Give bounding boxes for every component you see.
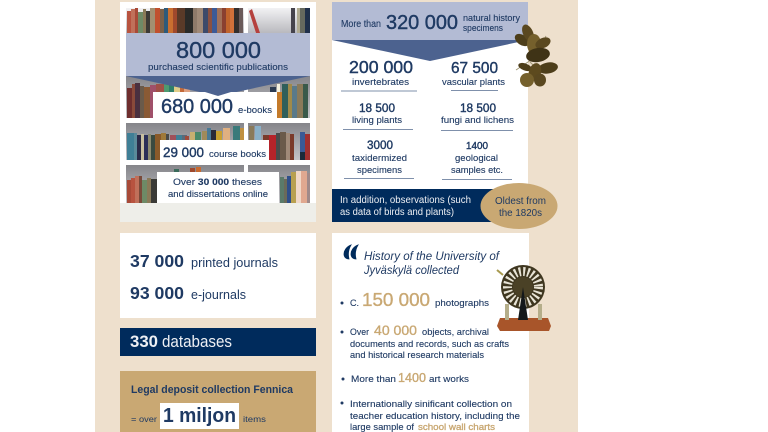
label box: theses and dissertations: and dissertations online xyxy=(168,189,268,200)
heading: 320 000 natural history specimens xyxy=(341,12,520,34)
bullet: art works: 1400 xyxy=(398,371,426,385)
stat: vascular plants: vascular plants xyxy=(442,77,505,88)
label: purchased scientific publications: purchased scientific publications xyxy=(148,62,288,72)
label box: 29 000 course books: course books xyxy=(209,149,266,160)
panel: databases xyxy=(120,328,316,356)
background panel xyxy=(95,0,578,432)
bullet: art works xyxy=(342,371,469,385)
panel: legal deposit collection: Legal deposit collection Fennica xyxy=(131,384,294,396)
bullet: art works: More than xyxy=(351,374,396,385)
stat: fungi and lichens xyxy=(441,101,514,131)
heading: 320 000 natural history specimens: 320 000 xyxy=(386,12,458,34)
icon: quotation mark xyxy=(344,245,358,259)
panel: databases: 330 xyxy=(130,333,158,351)
bullet: teacher education history: teacher education history, including the xyxy=(350,411,520,422)
stat: living plants: living plants xyxy=(352,115,402,126)
panel: journals: printed journals xyxy=(191,255,278,270)
label box: 29 000 course books: 29 000 xyxy=(163,145,204,160)
panel: publications bookshelf xyxy=(120,2,316,222)
bookshelf row 1 xyxy=(126,8,310,33)
stat: fungi and lichens: fungi and lichens xyxy=(441,115,514,126)
icon: pressed plant xyxy=(513,23,559,87)
stat: fungi and lichens: 18 500 xyxy=(460,101,496,115)
bullet: objects: objects, archival xyxy=(422,327,489,338)
bullet: teacher education history xyxy=(340,399,520,432)
band: 800 000 publications xyxy=(126,33,310,96)
bookshelf row 3 xyxy=(126,123,310,160)
stat: living plants xyxy=(343,101,413,130)
stat: taxidermized specimens xyxy=(344,138,414,179)
bullet: art works: art works xyxy=(429,374,469,385)
bullet: objects: and historical research materials xyxy=(350,350,484,361)
bookshelf row 2 xyxy=(126,76,310,118)
stat: living plants: 18 500 xyxy=(359,101,395,115)
heading: 320 000 natural history specimens: specimens xyxy=(463,23,503,33)
panel: journals: e-journals xyxy=(191,287,246,302)
panel: legal deposit collection: 1 miljon xyxy=(163,405,236,427)
label box: 680 000 e-books: 680 000 xyxy=(161,96,233,118)
panel: journals: 37 000 xyxy=(130,251,184,271)
panel: databases: databases xyxy=(162,333,232,351)
label box: 680 000 e-books xyxy=(153,92,277,118)
callout: oldest from the 1820s: Oldest from xyxy=(495,196,546,207)
bullet: objects: documents and records, such as crafts xyxy=(350,339,509,350)
bullet: teacher education history: Internationally sinificant collection on xyxy=(350,399,512,410)
band: additional observations: In addition, observations (such xyxy=(340,195,471,206)
stat: vascular plants: 67 500 xyxy=(451,60,498,77)
panel: legal deposit collection: = over xyxy=(131,414,157,424)
panel: journals: 93 000 xyxy=(130,283,184,303)
band: additional observations xyxy=(332,189,512,222)
stat: geological samples xyxy=(442,141,512,180)
stat: invertebrates: 200 000 xyxy=(349,57,413,77)
band: additional observations: as data of birds and plants) xyxy=(340,207,454,218)
heading: 320 000 natural history specimens: natural history xyxy=(463,13,520,23)
bookshelf row 4 xyxy=(126,165,310,203)
bullet: objects xyxy=(340,322,509,361)
stat: taxidermized specimens: taxidermized xyxy=(352,153,407,164)
stat: taxidermized specimens: 3000 xyxy=(367,138,393,152)
bullet: photographs: C. xyxy=(350,298,359,309)
bullet: photographs xyxy=(340,289,489,310)
label box: theses and dissertations xyxy=(157,172,279,203)
label box: 29 000 course books xyxy=(160,140,269,160)
stat: geological samples: geological xyxy=(455,153,498,164)
heading: history collected: History of the University of xyxy=(364,249,501,263)
panel: natural history specimens xyxy=(332,2,528,190)
panel: legal deposit collection xyxy=(120,371,316,432)
stat: invertebrates xyxy=(341,57,417,92)
stat: invertebrates: invertebrates xyxy=(352,77,409,88)
heading: 320 000 natural history specimens: More than xyxy=(341,19,381,30)
icon: Wimshurst machine xyxy=(497,265,551,331)
callout: oldest from the 1820s xyxy=(480,183,558,229)
panel: journals xyxy=(120,233,316,318)
bullet: objects: 40 000 xyxy=(374,322,417,338)
stat: taxidermized specimens: specimens xyxy=(357,165,402,176)
number: 800 000: 800 000 xyxy=(176,37,261,63)
stat: vascular plants xyxy=(442,60,505,91)
panel: university history collection xyxy=(332,233,529,432)
bullet: objects: Over xyxy=(350,327,369,338)
panel: legal deposit collection: items xyxy=(243,414,266,424)
callout: oldest from the 1820s: the 1820s xyxy=(499,208,542,219)
heading: history collected xyxy=(363,249,501,277)
label box: theses and dissertations: Over 30 000 theses xyxy=(173,177,262,188)
stat: geological samples: samples etc. xyxy=(451,165,503,176)
heading: history collected: Jyväskylä collected xyxy=(363,263,459,277)
label box: 680 000 e-books: e-books xyxy=(238,105,273,115)
stat: geological samples: 1400 xyxy=(466,141,488,152)
bullet: photographs: photographs xyxy=(435,298,489,309)
bullet: photographs: 150 000 xyxy=(362,289,430,310)
